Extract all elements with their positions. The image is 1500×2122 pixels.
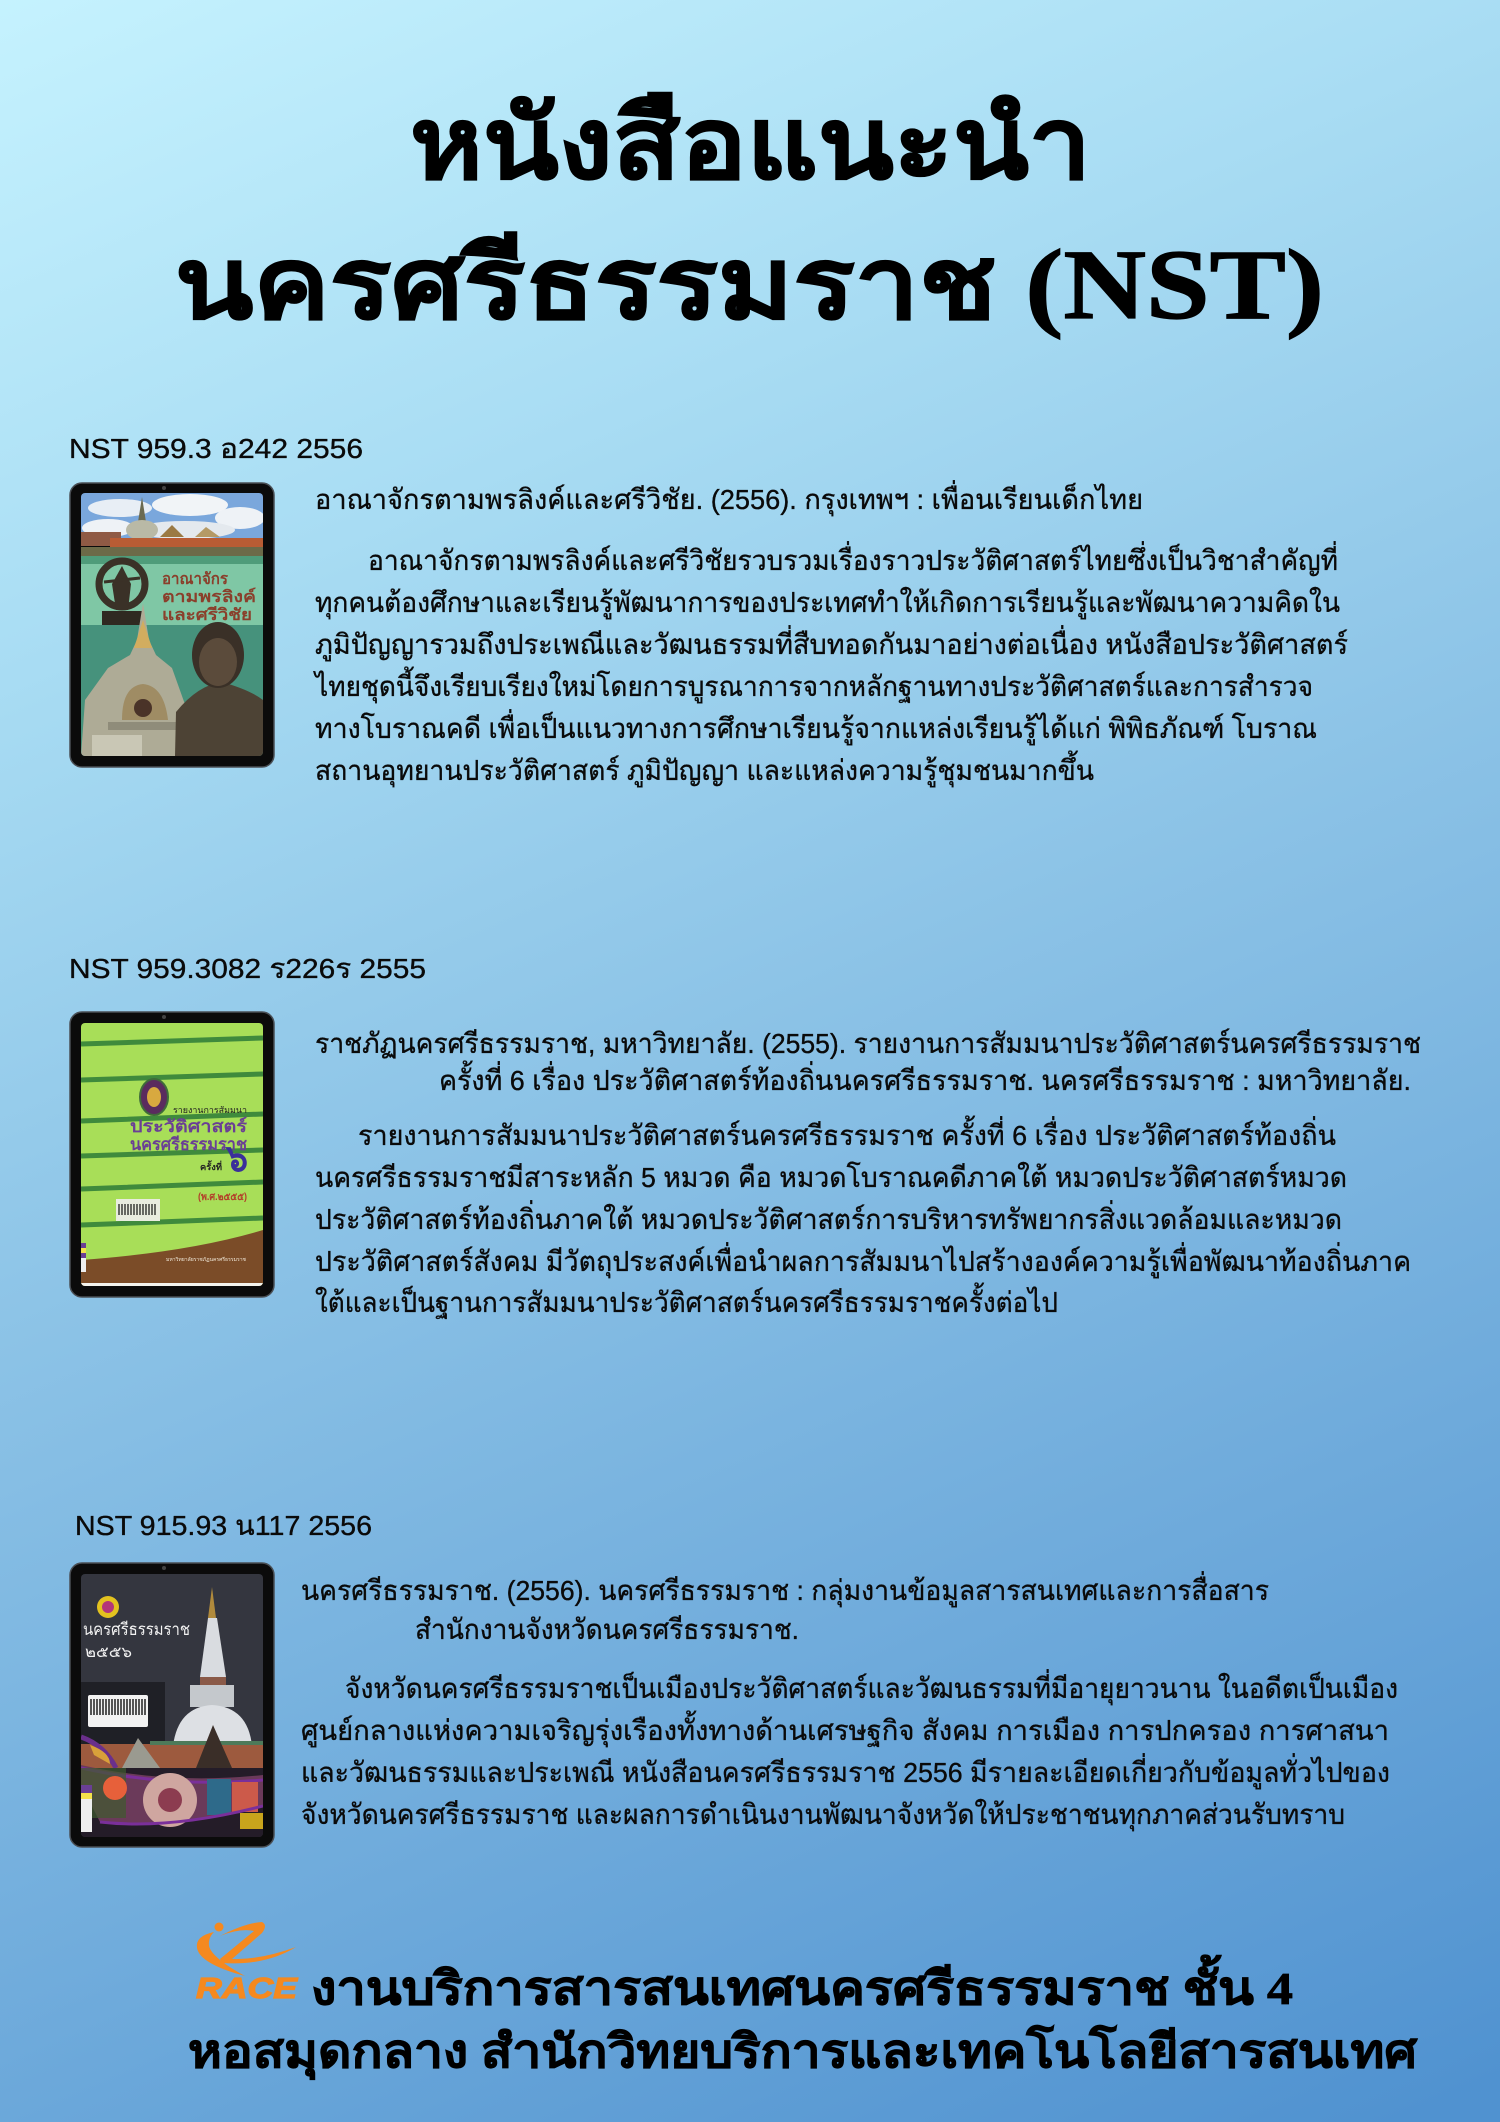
panel: book 3 bbox=[70, 1510, 1398, 1847]
footer text: งานบริการสารสนเทศนครศรีธรรมราช ชั้น 4 bbox=[311, 1954, 1293, 2014]
description 1 bbox=[313, 541, 1348, 788]
call number 1: NST 959.3 อ242 2556 bbox=[69, 433, 363, 464]
icon: tablet with cover of book 2: ครั้งที่ bbox=[200, 1160, 222, 1172]
description 2: ใต้และเป็นฐานการสัมมนาประวัติศาสตร์นครศรีธรรมราชครั้งต่อไป bbox=[315, 1282, 1058, 1319]
description 1: ทุกคนต้องศึกษาและเรียนรู้พัฒนาการของประเทศทำให้เกิดการเรียนรู้และพัฒนาความคิดใน bbox=[315, 586, 1340, 620]
footer text bbox=[188, 1954, 1418, 2080]
description 3: ศูนย์กลางแห่งความเจริญรุ่งเรืองทั้งทางด้านเศรษฐกิจ สังคม การเมือง การปกครอง การศาสนา bbox=[301, 1710, 1389, 1748]
icon: RACE logo bbox=[196, 1922, 299, 2005]
icon: tablet with cover of book 1: อาณาจักร bbox=[162, 570, 228, 588]
panel: book 2 bbox=[69, 953, 1421, 1319]
description 3: และวัฒนธรรมและประเพณี หนังสือนครศรีธรรมราช 2556 มีรายละเอียดเกี่ยวกับข้อมูลทั่วไปของ bbox=[301, 1753, 1390, 1790]
description 1: สถานอุทยานประวัติศาสตร์ ภูมิปัญญา และแหล่งความรู้ชุมชนมากขึ้น bbox=[315, 750, 1094, 788]
description 2: นครศรีธรรมราชมีสาระหลัก 5 หมวด คือ หมวดโบราณคดีภาคใต้ หมวดประวัติศาสตร์หมวด bbox=[315, 1161, 1347, 1193]
citation 3 bbox=[301, 1571, 1269, 1645]
description 2 bbox=[315, 1115, 1411, 1319]
footer text: หอสมุดกลาง สำนักวิทยบริการและเทคโนโลยีสารสนเทศ bbox=[188, 2024, 1418, 2080]
citation 3: สำนักงานจังหวัดนครศรีธรรมราช. bbox=[415, 1614, 799, 1645]
description 2: รายงานการสัมมนาประวัติศาสตร์นครศรีธรรมราช ครั้งที่ 6 เรื่อง ประวัติศาสตร์ท้องถิ่น bbox=[358, 1115, 1336, 1151]
citation 2 bbox=[315, 1028, 1421, 1096]
description 1: อาณาจักรตามพรลิงค์และศรีวิชัยรวบรวมเรื่องราวประวัติศาสตร์ไทยซึ่งเป็นวิชาสำคัญที่ bbox=[368, 541, 1338, 576]
icon: tablet with cover of book 2: (พ.ศ.๒๕๕๕) bbox=[198, 1192, 247, 1203]
panel: book 1 bbox=[69, 433, 1348, 788]
description 3: จังหวัดนครศรีธรรมราชเป็นเมืองประวัติศาสตร์และวัฒนธรรมที่มีอายุยาวนาน ในอดีตเป็นเมือง bbox=[345, 1669, 1398, 1706]
icon: tablet with cover of book 2 bbox=[70, 1012, 274, 1297]
title: หนังสือแนะนำ bbox=[410, 89, 1091, 200]
call number 3: NST 915.93 น117 2556 bbox=[75, 1510, 372, 1541]
description 1: ทางโบราณคดี เพื่อเป็นแนวทางการศึกษาเรียนรู้จากแหล่งเรียนรู้ได้แก่ พิพิธภัณฑ์ โบราณ bbox=[315, 709, 1317, 746]
description 1: ภูมิปัญญารวมถึงประเพณีและวัฒนธรรมที่สืบทอดกันมาอย่างต่อเนื่อง หนังสือประวัติศาสตร์ bbox=[315, 625, 1348, 662]
title bbox=[175, 89, 1324, 340]
title: นครศรีธรรมราช (NST) bbox=[175, 229, 1324, 340]
icon: RACE logo: RACE bbox=[196, 1973, 299, 2005]
citation 2: ราชภัฏนครศรีธรรมราช, มหาวิทยาลัย. (2555). รายงานการสัมมนาประวัติศาสตร์นครศรีธรรมราช bbox=[315, 1028, 1421, 1059]
call number 2: NST 959.3082 ร226ร 2555 bbox=[69, 953, 426, 984]
citation 3: นครศรีธรรมราช. (2556). นครศรีธรรมราช : กลุ่มงานข้อมูลสารสนเทศและการสื่อสาร bbox=[301, 1571, 1269, 1608]
icon: tablet with cover of book 1: และศรีวิชัย bbox=[162, 605, 252, 624]
icon: tablet with cover of book 3: นครศรีธรรมราช bbox=[83, 1620, 190, 1639]
icon: tablet with cover of book 2: ประวัติศาสตร์ bbox=[130, 1116, 248, 1136]
icon: tablet with cover of book 3 bbox=[70, 1563, 274, 1847]
citation 1: อาณาจักรตามพรลิงค์และศรีวิชัย. (2556). กรุงเทพฯ : เพื่อนเรียนเด็กไทย bbox=[315, 480, 1143, 517]
description 2: ประวัติศาสตร์สังคม มีวัตถุประสงค์เพื่อนำผลการสัมมนาไปสร้างองค์ความรู้เพื่อพัฒนาท้องถิ่นภาค bbox=[315, 1242, 1411, 1279]
icon: tablet with cover of book 2: ๖ bbox=[224, 1138, 248, 1180]
description 1: ไทยชุดนี้จึงเรียบเรียงใหม่โดยการบูรณาการจากหลักฐานทางประวัติศาสตร์และการสำรวจ bbox=[313, 666, 1313, 704]
icon: tablet with cover of book 1 bbox=[70, 483, 274, 767]
description 2: ประวัติศาสตร์ท้องถิ่นภาคใต้ หมวดประวัติศาสตร์การบริหารทรัพยากรสิ่งแวดล้อมและหมวด bbox=[315, 1200, 1342, 1235]
icon: tablet with cover of book 2: มหาวิทยาลัยราชภัฏนครศรีธรรมราช bbox=[166, 1256, 247, 1263]
description 3 bbox=[301, 1669, 1398, 1832]
icon: tablet with cover of book 2: รายงานการสัมมนา bbox=[173, 1105, 247, 1115]
icon: tablet with cover of book 1: ตามพรลิงค์ bbox=[162, 587, 256, 606]
citation 2: ครั้งที่ 6 เรื่อง ประวัติศาสตร์ท้องถิ่นนครศรีธรรมราช. นครศรีธรรมราช : มหาวิทยาลัย. bbox=[439, 1060, 1411, 1096]
icon: tablet with cover of book 3: ๒๕๕๖ bbox=[85, 1644, 132, 1661]
description 3: จังหวัดนครศรีธรรมราช และผลการดำเนินงานพัฒนาจังหวัดให้ประชาชนทุกภาคส่วนรับทราบ bbox=[301, 1798, 1345, 1832]
icon: tablet with cover of book 2: นครศรีธรรมราช bbox=[130, 1134, 247, 1154]
